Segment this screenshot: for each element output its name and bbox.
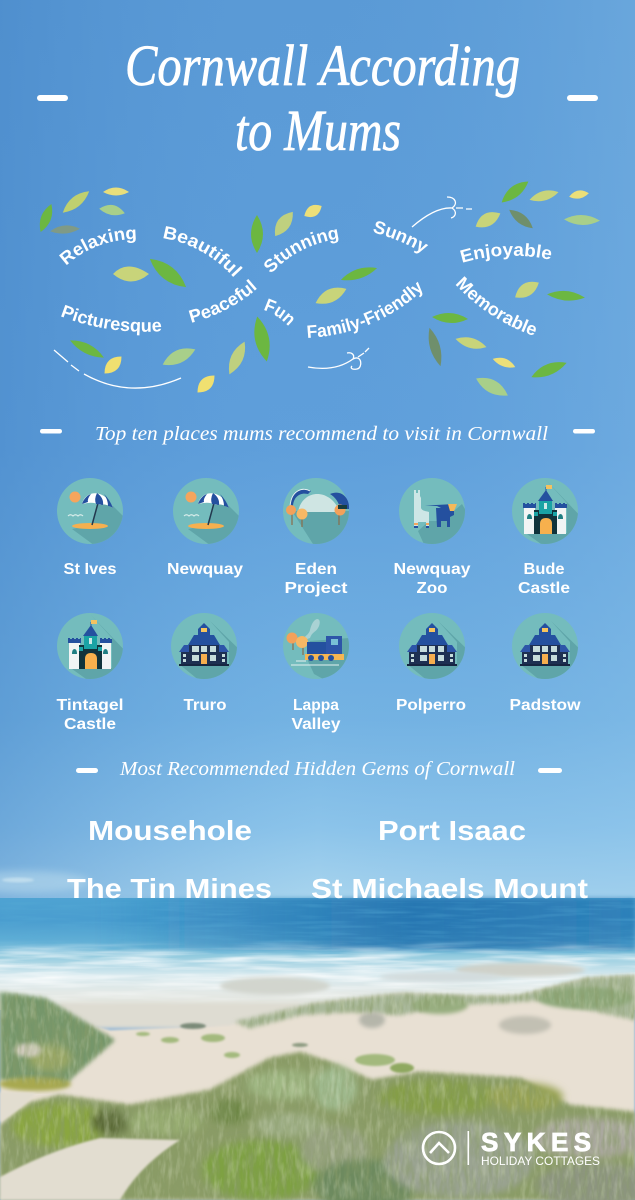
- gem: The Tin Mines: The Tin Mines: [67, 873, 272, 904]
- word: Relaxing: Relaxing: [59, 228, 136, 265]
- heading: top ten places: Top ten places mums recommend to visit in Cornwall: [95, 423, 548, 445]
- gems dash left: [76, 768, 98, 773]
- place: Eden Project: Project: [284, 580, 348, 597]
- sand dunes: [0, 975, 635, 1200]
- place: Lappa Valley: [283, 613, 356, 733]
- sand tufts: [136, 1023, 414, 1073]
- logo: Sykes Holiday Cottages: [423, 1127, 600, 1168]
- beach photograph: [0, 898, 635, 1200]
- gem: Port Isaac: Port Isaac: [378, 815, 526, 846]
- place: Lappa Valley: Valley: [292, 716, 341, 733]
- place: Bude Castle: Bude: [524, 561, 565, 578]
- word: Peaceful: Peaceful: [188, 279, 257, 323]
- left dune: [0, 992, 115, 1091]
- place: Eden Project: Eden: [295, 561, 337, 578]
- place: Newquay Zoo: Zoo: [416, 580, 448, 597]
- place: Newquay: Newquay: [167, 561, 243, 578]
- place: Padstow: Padstow: [510, 697, 582, 714]
- place: Padstow: [510, 613, 585, 714]
- wet sand patches: [60, 963, 585, 1029]
- place: Polperro: [396, 613, 472, 714]
- place: Newquay Zoo: Newquay: [394, 561, 471, 578]
- icon: house in circle: [423, 1132, 455, 1164]
- logo divider: [468, 1131, 469, 1165]
- grass texture: [0, 970, 635, 1200]
- heading dash right: [573, 429, 595, 434]
- sky background: [0, 0, 635, 900]
- place: Eden Project: [283, 478, 349, 597]
- place: Truro: [171, 613, 244, 714]
- leaves: [36, 177, 600, 401]
- word cloud: infinity of words and leaves: [40, 182, 600, 396]
- place: Newquay: [167, 478, 246, 578]
- logo strapline: HOLIDAY COTTAGES: [481, 1154, 600, 1168]
- title: [125, 33, 520, 163]
- place: Bude Castle: Castle: [518, 580, 570, 597]
- sea: [0, 898, 635, 1010]
- gems dash right: [538, 768, 562, 773]
- dashed trail lower left: [54, 350, 181, 388]
- place: St Ives: [57, 478, 130, 578]
- word: Sunny: Sunny: [374, 221, 428, 254]
- word: Picturesque: Picturesque: [61, 304, 162, 336]
- right dune grass: [235, 975, 635, 1034]
- heading: hidden gems: Most Recommended Hidden Gems of Cornwall: [119, 758, 515, 780]
- place: Polperro: Polperro: [396, 697, 466, 714]
- place: St Ives: St Ives: [64, 561, 116, 578]
- gem: St Michaels Mount: St Michaels Mount: [311, 873, 588, 904]
- place: Tintagel Castle: [56, 613, 130, 733]
- word: Memorable: Memorable: [456, 276, 536, 335]
- curled trail upper right: [412, 197, 472, 227]
- grass mass: [0, 1052, 635, 1200]
- word: Enjoyable: Enjoyable: [460, 243, 552, 262]
- place: Newquay Zoo: [394, 478, 472, 597]
- title dash right: [567, 95, 598, 101]
- word: Beautiful: Beautiful: [163, 226, 243, 277]
- word: Family-Friendly: Family-Friendly: [307, 282, 422, 338]
- place: Lappa Valley: Lappa: [293, 697, 339, 714]
- place: Tintagel Castle: Castle: [64, 716, 116, 733]
- foreground sand mounds: [0, 1092, 180, 1200]
- title: Cornwall According: [125, 33, 520, 98]
- title dash left: [37, 95, 68, 101]
- curled trail lower middle: [308, 348, 369, 369]
- gem: Mousehole: Mousehole: [88, 815, 252, 846]
- word: Fun: Fun: [264, 298, 294, 326]
- logo wordmark: SYKES: [481, 1127, 597, 1157]
- place: Truro: Truro: [184, 697, 226, 714]
- place: Bude Castle: [512, 478, 585, 597]
- heading dash left: [40, 429, 62, 434]
- place: Tintagel Castle: Tintagel: [56, 697, 124, 714]
- title: to Mums: [235, 98, 401, 163]
- word: Stunning: Stunning: [264, 229, 338, 272]
